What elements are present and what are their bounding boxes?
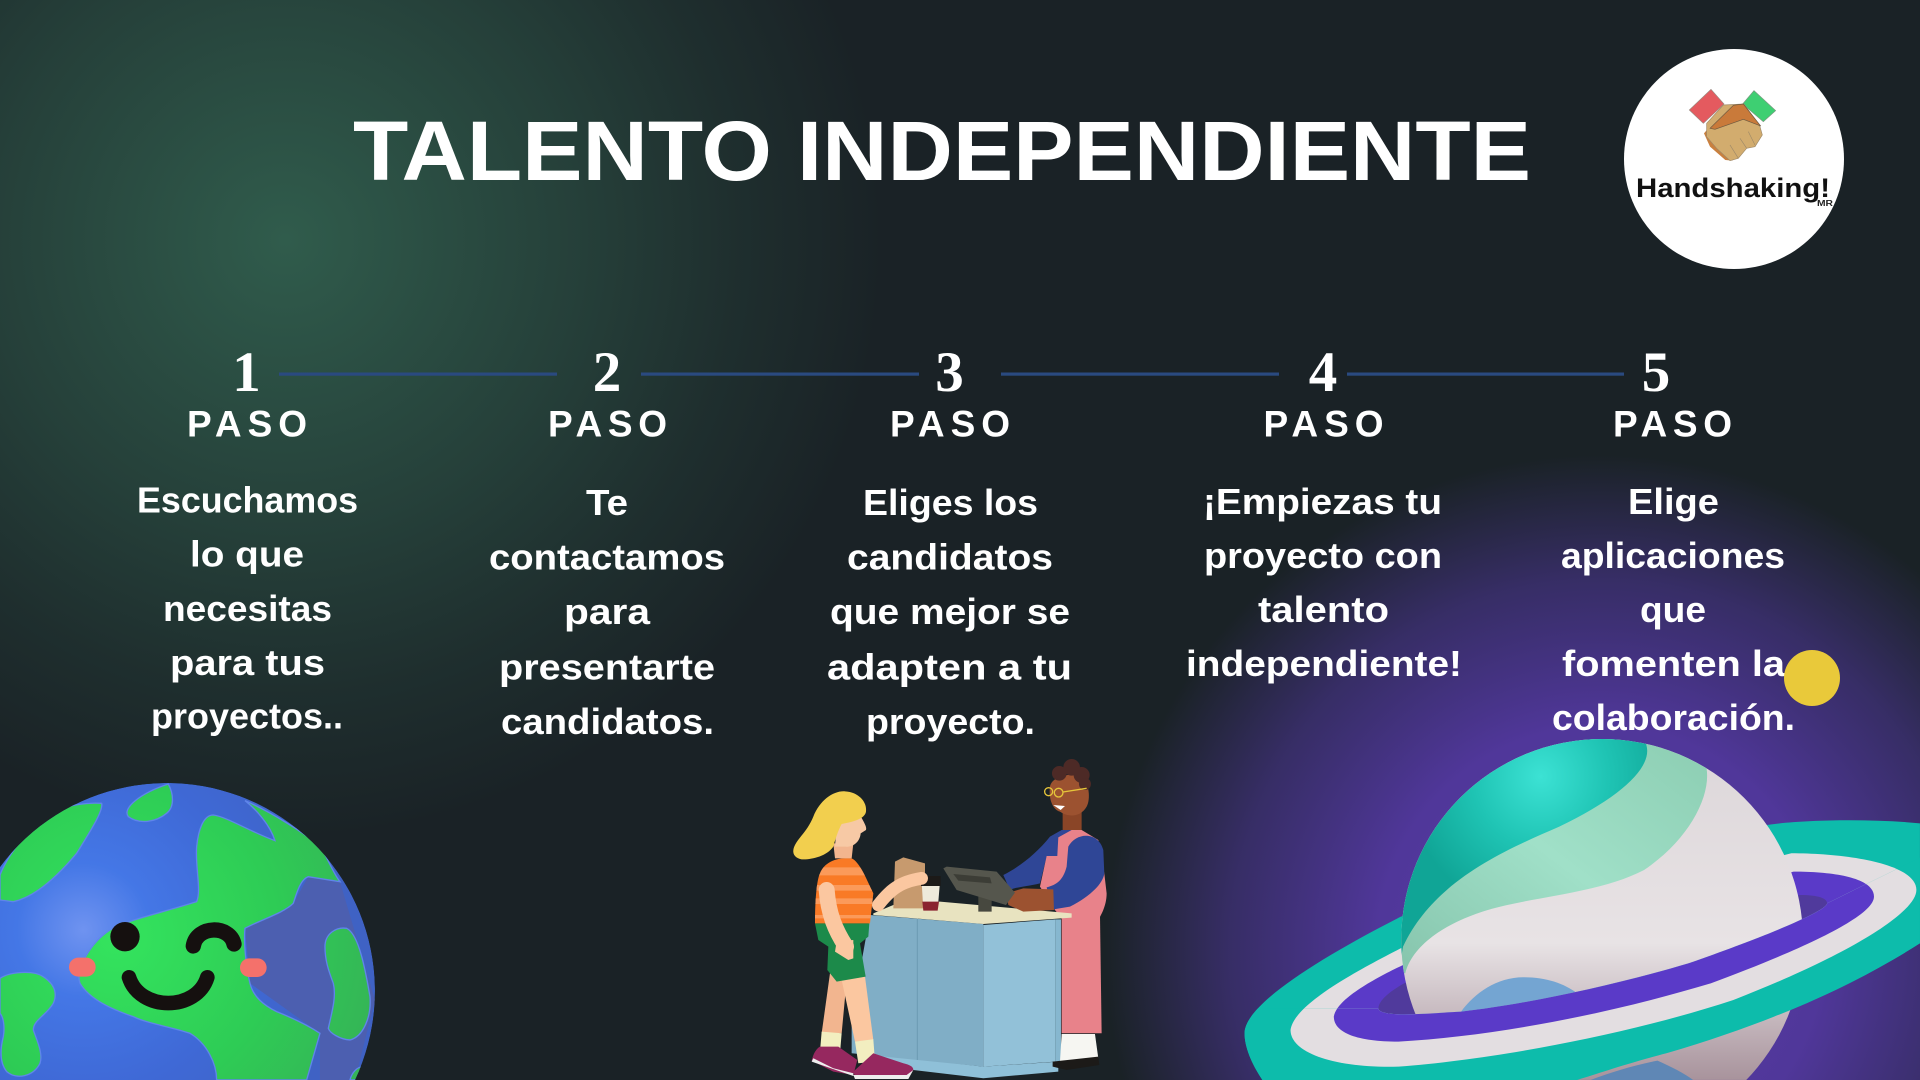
step 2 description: candidatos. xyxy=(501,701,714,742)
paper bag and coffee cup xyxy=(893,857,941,911)
step 1 description xyxy=(137,480,358,736)
earth face xyxy=(69,922,267,1003)
illustration: smiling earth xyxy=(0,783,375,1080)
illustration: customer and cashier at counter xyxy=(793,759,1107,1079)
step 3 description: proyecto. xyxy=(866,701,1035,742)
step 5 description: fomenten la xyxy=(1562,643,1786,684)
planet ring front xyxy=(1244,858,1920,1080)
step 2 description xyxy=(489,482,725,742)
planet ring back xyxy=(1245,820,1920,1080)
step connector lines xyxy=(279,372,1624,376)
step 1 number: 1 xyxy=(232,341,261,404)
step 5 description: Elige xyxy=(1628,481,1719,522)
step 3 description: que mejor se xyxy=(830,591,1070,632)
step 4 xyxy=(1186,341,1462,684)
step 4 description: ¡Empiezas tu xyxy=(1203,481,1442,522)
step 1 description: necesitas xyxy=(163,588,332,629)
earth right ocean xyxy=(245,877,375,1080)
step 3 xyxy=(827,341,1072,742)
step 3 description: candidatos xyxy=(847,536,1053,577)
counter xyxy=(852,915,1061,1078)
step 5 description: aplicaciones xyxy=(1561,535,1785,576)
step 3 description: adapten a tu xyxy=(827,646,1072,687)
step 3 number: 3 xyxy=(935,341,964,404)
logo: Handshaking! xyxy=(1624,49,1844,269)
step 5 description xyxy=(1552,481,1795,738)
icon: handshake xyxy=(1689,89,1776,161)
logo registered mark: MR xyxy=(1817,199,1833,208)
step 3 description xyxy=(827,482,1072,742)
customer xyxy=(793,791,922,1079)
step 5 xyxy=(1552,341,1795,738)
step 5 number: 5 xyxy=(1642,341,1670,404)
step 1 description: para tus xyxy=(170,642,325,683)
step 1 label: PASO xyxy=(187,404,307,444)
icon: yellow sun xyxy=(1784,650,1840,706)
earth continents xyxy=(0,784,370,1080)
step 4 description xyxy=(1186,481,1462,684)
step 2 xyxy=(489,341,725,742)
step 4 description: independiente! xyxy=(1186,643,1462,684)
step 1 description: proyectos.. xyxy=(151,695,343,736)
step 1 xyxy=(137,341,358,736)
step 4 description: proyecto con xyxy=(1204,535,1442,576)
cashier hand xyxy=(1007,888,1054,912)
step 1 description: lo que xyxy=(190,534,304,575)
step 2 description: Te xyxy=(586,482,628,523)
earth globe xyxy=(0,783,375,1080)
step 4 label: PASO xyxy=(1264,404,1384,444)
step 2 description: presentarte xyxy=(499,646,715,687)
step 2 description: contactamos xyxy=(489,536,725,577)
step 5 label: PASO xyxy=(1613,404,1732,444)
illustration: ringed planet xyxy=(1245,738,1920,1080)
counter top xyxy=(873,902,1072,924)
step 2 number: 2 xyxy=(593,341,621,404)
logo wordmark: Handshaking! xyxy=(1636,173,1830,203)
step 2 label: PASO xyxy=(548,404,667,444)
step 5 description: que xyxy=(1640,589,1706,630)
title: TALENTO INDEPENDIENTE xyxy=(353,104,1531,198)
till monitor xyxy=(943,867,1015,912)
step 3 label: PASO xyxy=(890,404,1010,444)
step 4 number: 4 xyxy=(1309,341,1337,404)
step 1 description: Escuchamos xyxy=(137,480,358,521)
cashier xyxy=(1003,759,1107,1070)
step 5 description: colaboración. xyxy=(1552,697,1795,738)
step 2 description: para xyxy=(564,591,651,632)
planet body xyxy=(1399,738,1807,1080)
step 3 description: Eliges los xyxy=(863,482,1038,523)
step 4 description: talento xyxy=(1258,589,1389,630)
